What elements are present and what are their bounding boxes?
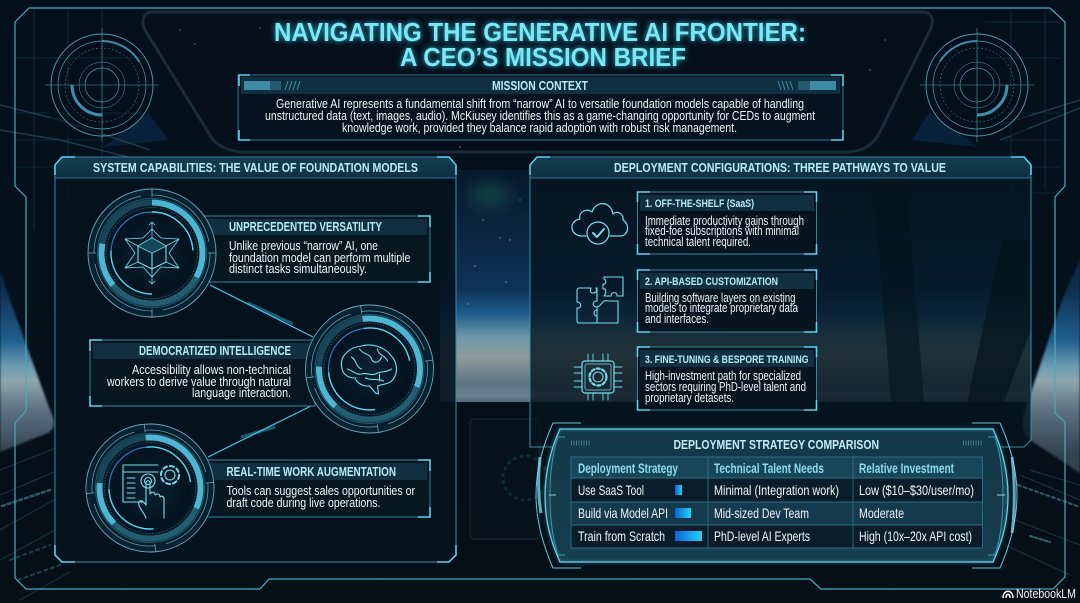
- card 2 text: models to integrate proprietary data: [645, 301, 798, 315]
- connector lines: [208, 285, 315, 457]
- card 2 text: and interfaces.: [645, 312, 709, 326]
- panel: deployment configurations: [530, 157, 1031, 447]
- table header row: Technical Talent Needs: [714, 461, 824, 476]
- hud dial left: [45, 28, 159, 142]
- capability 3 text: Tools can suggest sales opportunities or: [226, 484, 415, 498]
- card 2 title: 2. API-BASED CUSTOMIZATION: [645, 276, 778, 288]
- capability 3 title: REAL-TIME WORK AUGMENTATION: [226, 465, 396, 479]
- capability 2 box: [90, 340, 315, 406]
- card 2: api-based customization: [638, 270, 816, 332]
- mission context text: [265, 96, 815, 135]
- capability 1 title: UNPRECEDENTED VERSATILITY: [229, 220, 383, 234]
- table row: scratch: [578, 528, 972, 544]
- table row: API: Moderate: [859, 505, 904, 521]
- title: A CEO’S MISSION BRIEF: [400, 44, 686, 72]
- capability 3 ring icon: touch and gear: [81, 419, 219, 557]
- icon: cloud with check: [572, 204, 628, 244]
- table row: SaaS: Low ($10–$30/user/mo): [859, 482, 974, 498]
- mission context text: knowledge work, provided they balance rapid adoption with robust risk management.: [342, 120, 737, 135]
- card 2 text: Building software layers on existing: [645, 291, 796, 305]
- table row: API: Build via Model API: [578, 505, 668, 521]
- table header row: [578, 461, 954, 476]
- table row: API: [578, 505, 904, 521]
- mission context text: Generative AI represents a fundamental shift from “narrow” AI to versatile foundation models capable of handling: [276, 96, 804, 111]
- card 1 text: fixed-foe subscriptions with minimal: [645, 224, 799, 238]
- card 1 title: 1. OFF-THE-SHELF (SaaS): [645, 198, 754, 210]
- card 1 text: Immediate productivity gains through: [645, 214, 804, 228]
- mission context text: unstructured data (text, images, audio). McKiusey identifies this as a game-changing opportunity for CEDs to augment: [265, 108, 815, 123]
- hud dial right: [920, 28, 1034, 142]
- table row: scratch: Train from Scratch: [578, 528, 665, 544]
- mission context heading: MISSION CONTEXT: [492, 79, 588, 93]
- comparison table: [571, 457, 982, 548]
- heading: system capabilities: SYSTEM CAPABILITIES: THE VALUE OF FOUNDATION MODELS: [93, 160, 418, 175]
- card 3: fine-tuning and bespore training: [638, 347, 816, 410]
- capability 2 title: DEMOCRATIZED INTELLIGENCE: [139, 344, 291, 358]
- table row: scratch: PhD-level AI Experts: [714, 528, 810, 544]
- capability 2 text: [106, 363, 291, 400]
- capability 1 box: [200, 216, 430, 282]
- card 1 text: [645, 214, 804, 249]
- capability 2 text: Accessibility allows non-technical: [132, 363, 291, 377]
- capability 1 text: [229, 239, 411, 276]
- icon: chip with gear: [574, 354, 622, 400]
- table row: SaaS: [578, 482, 974, 498]
- table header row: Deployment Strategy: [578, 461, 678, 476]
- table row: SaaS: Use SaaS Tool: [578, 482, 644, 498]
- title: NAVIGATING THE GENERATIVE AI FRONTIER:: [274, 19, 806, 47]
- capability 2 text: language interaction.: [192, 386, 291, 400]
- capability 3 text: [226, 484, 415, 510]
- capability 1 text: distinct tasks simultaneously.: [229, 262, 367, 276]
- panel: deployment strategy comparison: [536, 423, 1017, 568]
- card 3 text: sectors requiring PhD-level talent and: [645, 380, 806, 394]
- panel: mission context: [238, 75, 843, 140]
- capability 3 box: [200, 460, 430, 517]
- table row: scratch: High (10x–20x API cost): [859, 528, 972, 544]
- title: A CEO’S MISSION BRIEF: [400, 44, 686, 72]
- card 3 text: High-investment path for specialized: [645, 369, 801, 383]
- capability 1 text: Unlike previous “narrow” AI, one: [229, 239, 378, 253]
- heading: deployment configurations: DEPLOYMENT CONFIGURATIONS: THREE PATHWAYS TO VALUE: [614, 160, 946, 175]
- card 3 text: proprietary detasets.: [645, 391, 734, 405]
- title: [274, 19, 806, 72]
- card 1 text: technical talent required.: [645, 235, 751, 249]
- icon: puzzle pieces: [577, 277, 623, 323]
- capability 3 text: draft code during live operations.: [226, 496, 380, 510]
- card 2 text: [645, 291, 798, 326]
- capability 2 text: workers to derive value through natural: [106, 375, 291, 389]
- card 3 text: [645, 369, 806, 405]
- panel: system capabilities: [55, 157, 456, 562]
- table row: SaaS: Minimal (Integration work): [714, 482, 839, 498]
- comparison heading: DEPLOYMENT STRATEGY COMPARISON: [674, 437, 879, 452]
- table header row: Relative Investment: [859, 461, 954, 476]
- capability 1 ring icon: cube: [88, 189, 216, 317]
- capability 1 text: foundation model can perform multiple: [229, 251, 411, 265]
- card 3 title: 3. FINE-TUNING & BESPORE TRAINING: [645, 354, 808, 366]
- capability 2 ring icon: brain: [297, 297, 442, 441]
- card 1: off-the-shelf: [638, 192, 816, 254]
- title: NAVIGATING THE GENERATIVE AI FRONTIER:: [274, 19, 806, 47]
- table row: API: Mid-sized Dev Team: [714, 505, 809, 521]
